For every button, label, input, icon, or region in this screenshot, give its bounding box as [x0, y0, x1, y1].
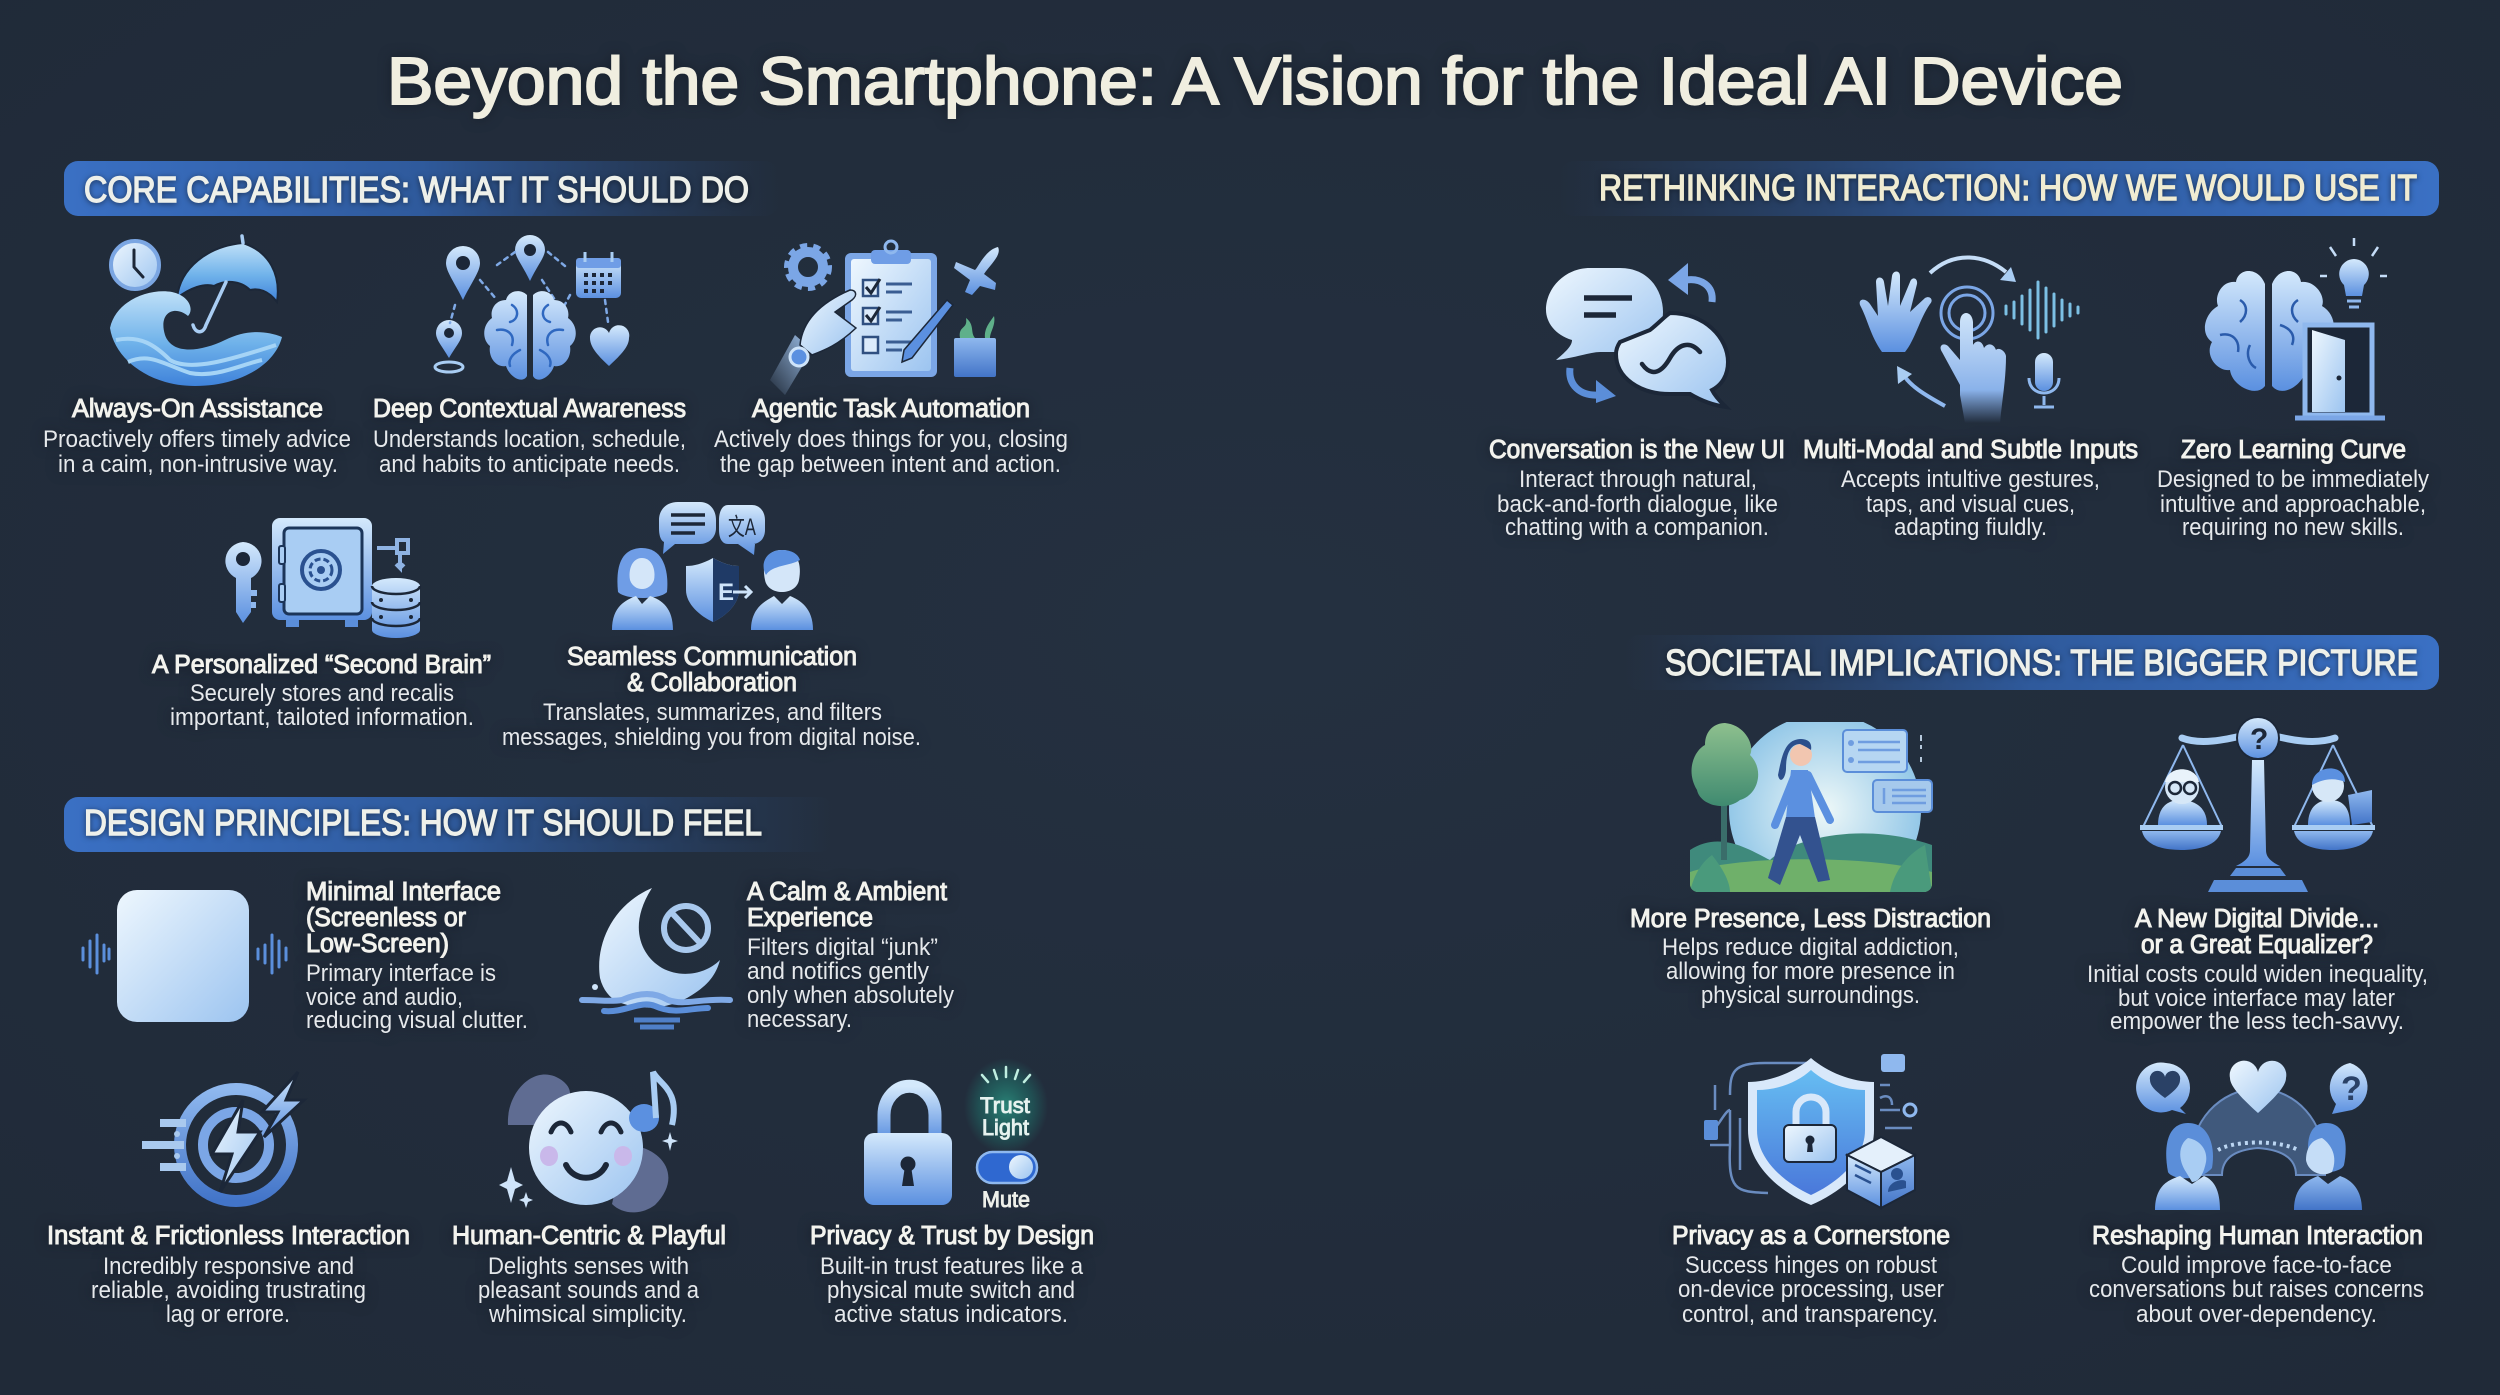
text: digital divide: A New Digital Divide...: [2135, 905, 2379, 933]
text: more presence: More Presence, Less Distraction: [1630, 905, 1991, 933]
icon: shield, lock and data box: [1704, 1054, 1916, 1208]
icon: screenless device with sound waves: [83, 890, 286, 1022]
text: deep contextual awareness: [373, 395, 686, 478]
icon: person walking in nature: [1690, 722, 1933, 892]
text: minimal interface: (Screenless or: [306, 904, 466, 932]
text: deep contextual awareness: and habits to anticipate needs.: [379, 451, 680, 478]
text: minimal interface: [306, 878, 528, 1034]
icon: lightning bolt target: [142, 1072, 304, 1201]
heading: societal implications: [1625, 635, 2439, 690]
text: human-centric and playful: pleasant sounds and a: [478, 1277, 700, 1304]
icon: balance scale with people: [2140, 717, 2375, 892]
text: zero learning curve: Designed to be immediately: [2157, 466, 2429, 493]
text: more presence: Helps reduce digital addiction,: [1662, 934, 1959, 961]
text: zero learning curve: requiring no new skills.: [2182, 514, 2404, 541]
icon: two people under a heart arch: ?: [2341, 1070, 2362, 1108]
panel: societal implications: [1625, 635, 2439, 1328]
text: more presence: allowing for more presence in: [1666, 958, 1955, 985]
text: conversation is the new ui: chatting with a companion.: [1505, 514, 1769, 541]
text: calm and ambient: [747, 878, 954, 1033]
text: seamless communication: [502, 643, 921, 751]
text: calm and ambient: A Calm & Ambient: [747, 878, 947, 906]
text: always-on assistance: in a caim, non-intrusive way.: [58, 451, 338, 478]
text: more presence: [1630, 905, 1991, 1009]
icon: brain, light bulb and open door: [2205, 238, 2387, 418]
icon: people with speech bubbles and shield: [612, 502, 813, 630]
text: zero learning curve: Zero Learning Curve: [2181, 436, 2406, 464]
text: reshaping human interaction: Could improve face-to-face: [2121, 1252, 2392, 1279]
text: seamless communication: Translates, summarizes, and filters: [543, 699, 882, 726]
text: multi-modal and subtle inputs: [1803, 436, 2138, 541]
text: seamless communication: Seamless Communication: [567, 643, 857, 671]
heading: core capabilities: CORE CAPABILITIES: WHAT IT SHOULD DO: [84, 169, 749, 210]
text: minimal interface: Primary interface is: [306, 960, 496, 987]
icon: balance scale with people: ?: [2250, 723, 2268, 756]
text: human-centric and playful: [452, 1222, 726, 1328]
text: reshaping human interaction: [2089, 1222, 2424, 1328]
text: conversation is the new ui: back-and-forth dialogue, like: [1497, 491, 1778, 518]
text: privacy as a cornerstone: on-device processing, user: [1678, 1276, 1944, 1303]
text: privacy and trust by design: active status indicators.: [834, 1301, 1068, 1328]
text: privacy as a cornerstone: [1672, 1222, 1950, 1328]
text: privacy and trust by design: Privacy & Trust by Design: [810, 1222, 1094, 1250]
text: deep contextual awareness: Understands location, schedule,: [373, 426, 686, 453]
text: minimal interface: voice and audio,: [306, 984, 463, 1011]
icon: robot hand, checklist, gear, plane and bag: [770, 241, 999, 395]
icon: people with speech bubbles and shield: 文A: [728, 514, 756, 541]
icon: clock, umbrella and wave: [110, 236, 282, 386]
heading: rethinking interaction: [1560, 161, 2439, 216]
icon: crescent moon with do-not-disturb sign: [582, 888, 730, 1027]
panel: core capabilities: [43, 161, 1068, 751]
text: zero learning curve: [2157, 436, 2429, 541]
icon: people with speech bubbles and shield: E: [718, 579, 734, 606]
text: agentic task automation: Actively does things for you, closing: [714, 426, 1068, 453]
text: always-on assistance: [43, 395, 351, 478]
text: digital divide: but voice interface may later: [2118, 985, 2395, 1012]
text: minimal interface: Minimal Interface: [306, 878, 501, 906]
text: instant and frictionless: lag or errore.: [166, 1301, 290, 1328]
text: reshaping human interaction: conversations but raises concerns: [2089, 1276, 2424, 1303]
text: digital divide: or a Great Equalizer?: [2141, 931, 2373, 959]
icon: padlock with trust light and mute switch: Light: [982, 1115, 1029, 1140]
icon: two people under a heart arch: [2136, 1061, 2368, 1210]
text: calm and ambient: and notifics gently: [747, 958, 929, 985]
text: privacy and trust by design: Built-in trust features like a: [820, 1253, 1084, 1280]
text: privacy as a cornerstone: Success hinges on robust: [1685, 1252, 1937, 1279]
text: calm and ambient: necessary.: [747, 1006, 852, 1033]
text: conversation is the new ui: [1489, 436, 1785, 541]
heading: core capabilities: [64, 161, 779, 216]
icon: gesture, tap, voice and microphone: [1860, 257, 2078, 423]
text: multi-modal and subtle inputs: taps, and visual cues,: [1866, 491, 2075, 518]
text: human-centric and playful: whimsical simplicity.: [488, 1301, 687, 1328]
text: instant and frictionless: reliable, avoiding trustrating: [91, 1277, 366, 1304]
title: Beyond the Smartphone: A Vision for the Ideal AI Device: [387, 44, 2123, 119]
text: digital divide: empower the less tech-savvy.: [2110, 1008, 2404, 1035]
text: always-on assistance: Always-On Assistance: [72, 395, 323, 423]
heading: design principles: DESIGN PRINCIPLES: HOW IT SHOULD FEEL: [84, 802, 762, 843]
text: multi-modal and subtle inputs: Accepts intultive gestures,: [1841, 466, 2100, 493]
text: agentic task automation: [714, 395, 1068, 478]
text: calm and ambient: Filters digital “junk”: [747, 934, 938, 961]
text: instant and frictionless: [47, 1222, 410, 1328]
text: privacy and trust by design: [810, 1222, 1094, 1328]
icon: two speech bubbles with arrows: [1546, 263, 1728, 407]
text: reshaping human interaction: about over-dependency.: [2136, 1301, 2377, 1328]
icon: brain with pins, calendar and heart: [435, 235, 629, 380]
text: conversation is the new ui: Conversation is the New UI: [1489, 436, 1785, 464]
text: multi-modal and subtle inputs: Multi-Modal and Subtle Inputs: [1803, 436, 2138, 464]
icon: padlock with trust light and mute switch: Trust: [980, 1093, 1030, 1118]
text: second brain: Securely stores and recalis: [190, 680, 454, 707]
text: always-on assistance: Proactively offers timely advice: [43, 426, 351, 453]
text: more presence: physical surroundings.: [1701, 982, 1920, 1009]
text: multi-modal and subtle inputs: adapting fiuldly.: [1894, 514, 2047, 541]
icon: padlock with trust light and mute switch: [864, 1058, 1048, 1212]
text: zero learning curve: intultive and approachable,: [2160, 491, 2426, 518]
text: digital divide: [2087, 905, 2428, 1035]
text: minimal interface: Low-Screen): [306, 930, 449, 958]
text: reshaping human interaction: Reshaping Human Interaction: [2092, 1222, 2423, 1250]
text: privacy and trust by design: physical mute switch and: [827, 1277, 1075, 1304]
panel: rethinking interaction: [1489, 161, 2439, 541]
heading: rethinking interaction: RETHINKING INTERACTION: HOW WE WOULD USE IT: [1599, 167, 2417, 208]
text: digital divide: Initial costs could widen inequality,: [2087, 961, 2428, 988]
text: agentic task automation: the gap between intent and action.: [720, 451, 1061, 478]
panel: design principles: [47, 797, 1094, 1328]
icon: smiling face with music note: [499, 1072, 678, 1212]
text: conversation is the new ui: Interact through natural,: [1519, 466, 1757, 493]
icon: key, safe and database: [225, 518, 420, 638]
text: instant and frictionless: Instant & Frictionless Interaction: [47, 1222, 410, 1250]
text: seamless communication: & Collaboration: [627, 669, 797, 697]
text: privacy as a cornerstone: Privacy as a Cornerstone: [1672, 1222, 1950, 1250]
text: deep contextual awareness: Deep Contextual Awareness: [373, 395, 686, 423]
text: second brain: important, tailoted information.: [170, 704, 474, 731]
text: second brain: [152, 651, 491, 731]
heading: societal implications: SOCIETAL IMPLICATIONS: THE BIGGER PICTURE: [1665, 642, 2418, 683]
text: seamless communication: messages, shielding you from digital noise.: [502, 724, 921, 751]
text: human-centric and playful: Human-Centric & Playful: [452, 1222, 726, 1250]
text: calm and ambient: only when absolutely: [747, 982, 954, 1009]
text: calm and ambient: Experience: [747, 904, 873, 932]
text: human-centric and playful: Delights senses with: [488, 1253, 689, 1280]
text: privacy as a cornerstone: control, and transparency.: [1682, 1301, 1938, 1328]
text: agentic task automation: Agentic Task Automation: [752, 395, 1030, 423]
text: second brain: A Personalized “Second Brain”: [152, 651, 491, 679]
icon: padlock with trust light and mute switch: Mute: [982, 1187, 1030, 1212]
text: instant and frictionless: Incredibly responsive and: [103, 1253, 354, 1280]
text: minimal interface: reducing visual clutter.: [306, 1007, 528, 1034]
